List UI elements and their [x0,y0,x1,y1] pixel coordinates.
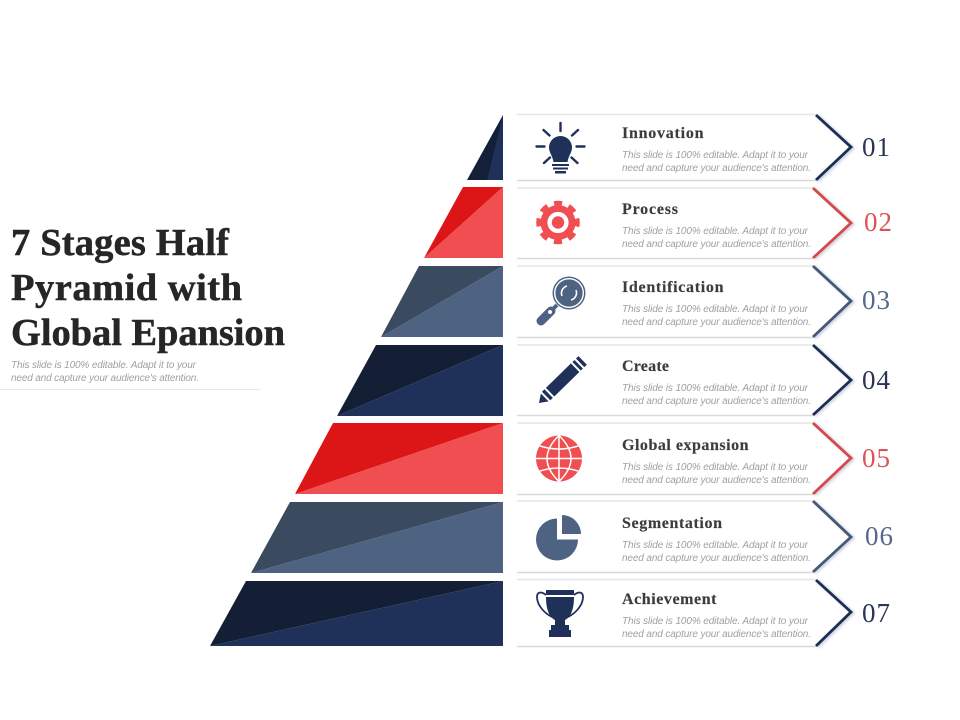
pyramid tier 5 [295,423,503,494]
title: 7 Stages Half [11,222,230,264]
number 5: 05 [862,443,890,473]
chevron 3 [813,266,851,337]
pyramid tier 1 [467,115,503,180]
number 6: 06 [865,521,893,551]
number 7: 07 [862,598,890,628]
description 3 [622,304,811,328]
pyramid tier 2 [424,187,503,258]
description 7: This slide is 100% editable. Adapt it to your [622,616,809,627]
icon: pencil [535,356,587,407]
description 7 [622,616,811,640]
description 5: need and capture your audience's attention. [622,475,811,486]
description 1: This slide is 100% editable. Adapt it to your [622,150,809,161]
description 3: need and capture your audience's attention. [622,317,811,328]
title: Pyramid with [11,267,242,309]
icon: trophy [537,590,583,637]
icon: globe [536,436,582,482]
chevron 6 [813,501,851,572]
description 5 [622,462,811,486]
description 2: This slide is 100% editable. Adapt it to your [622,226,809,237]
intro text [11,360,199,384]
description 4 [622,383,811,407]
description 4: need and capture your audience's attention. [622,396,811,407]
number 4: 04 [862,365,890,395]
icon: light bulb [536,123,584,174]
description 4: This slide is 100% editable. Adapt it to your [622,383,809,394]
pyramid tier 6 [251,502,503,573]
heading 2: Process [622,201,678,218]
chevron 7 [816,580,851,646]
heading 4: Create [622,358,669,375]
title: Global Epansion [11,312,285,354]
stage 4: create [517,345,890,416]
description 2 [622,226,811,250]
heading 6: Segmentation [622,515,722,532]
pyramid tier 3 [381,266,503,337]
stage 3: identification [517,266,890,338]
intro text: This slide is 100% editable. Adapt it to your [11,360,197,371]
heading 3: Identification [622,279,724,296]
heading 1: Innovation [622,125,704,142]
heading 5: Global expansion [622,437,749,454]
description 3: This slide is 100% editable. Adapt it to your [622,304,809,315]
half pyramid [210,115,503,646]
pyramid tier 4 [337,345,503,416]
number 2: 02 [864,207,892,237]
chevron 1 [816,115,851,180]
description 6: This slide is 100% editable. Adapt it to your [622,540,809,551]
heading 7: Achievement [622,591,717,608]
chevron 4 [813,345,851,415]
description 1 [622,150,811,174]
description 1: need and capture your audience's attention. [622,163,811,174]
stage 6: segmentation [517,501,893,572]
chevron 5 [813,423,851,494]
icon: magnifier [541,276,586,321]
stage 1: innovation [517,114,890,180]
icon: gear [539,204,577,242]
description 2: need and capture your audience's attention. [622,239,811,250]
stage 7: achievement [517,580,890,646]
pyramid tier 7 [210,581,503,646]
description 5: This slide is 100% editable. Adapt it to your [622,462,809,473]
intro text: need and capture your audience's attention. [11,373,199,384]
stage 5: global expansion [517,423,890,494]
description 7: need and capture your audience's attention. [622,629,811,640]
number 3: 03 [862,285,890,315]
description 6: need and capture your audience's attention. [622,553,811,564]
description 6 [622,540,811,564]
title [11,222,285,354]
number 1: 01 [862,132,890,162]
icon: pie chart [536,515,581,560]
chevron 2 [813,188,851,258]
stage 2: process [517,188,892,258]
